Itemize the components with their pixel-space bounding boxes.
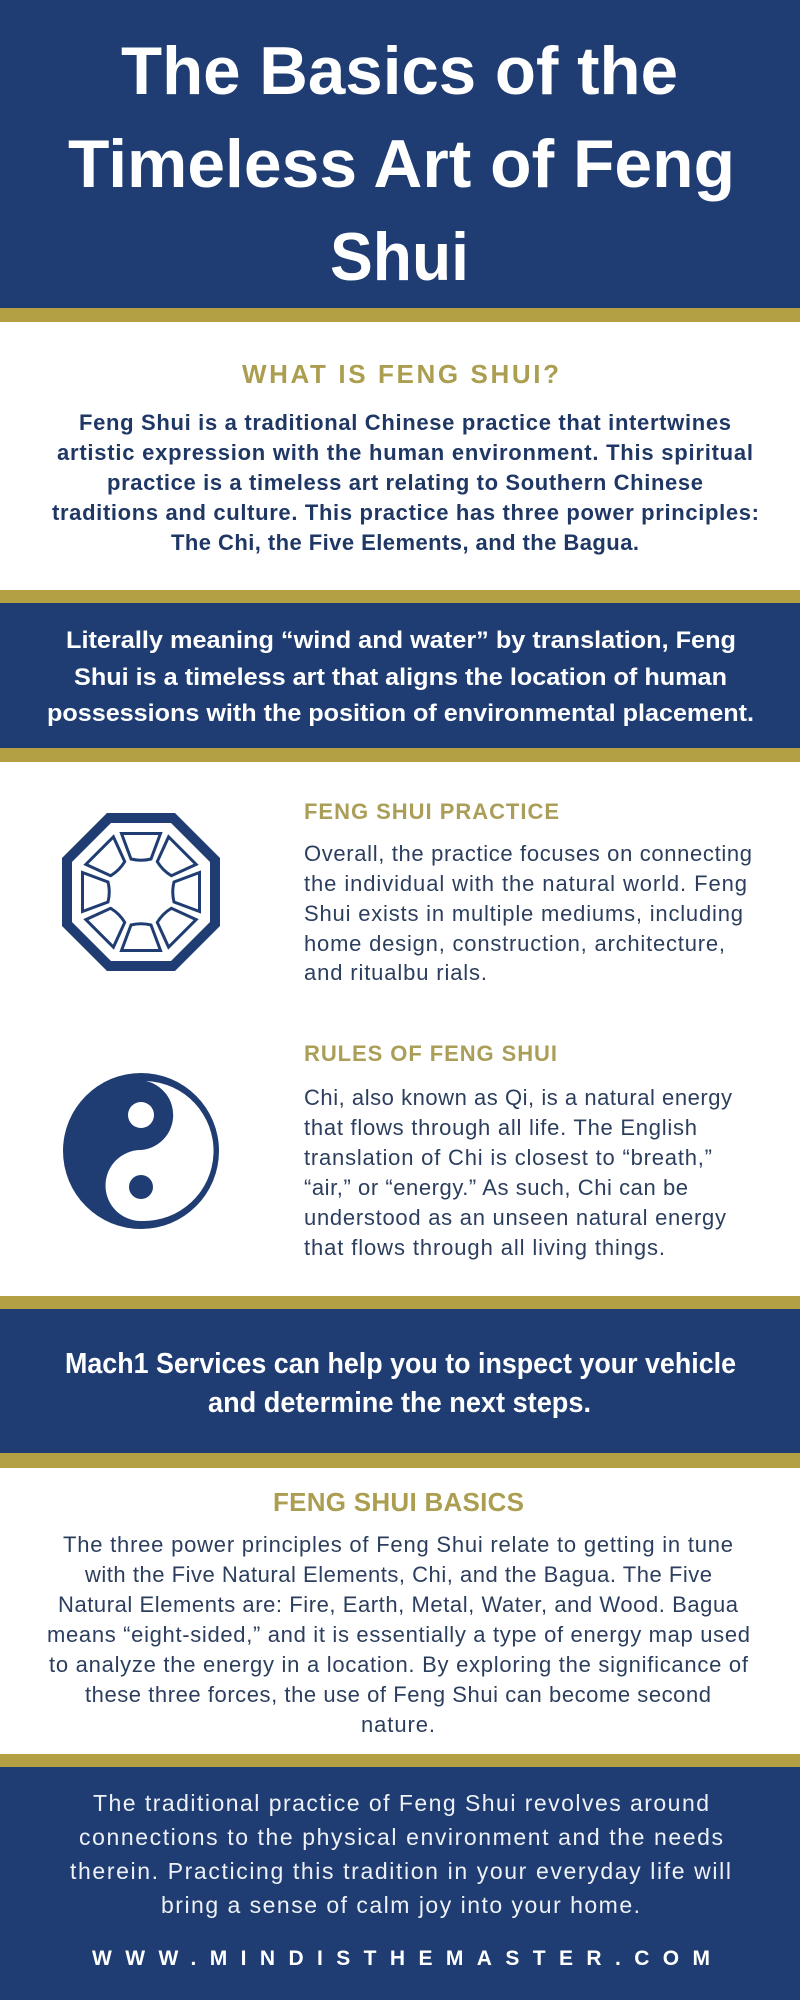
text block: rules: understood as an unseen natural energy bbox=[304, 1205, 726, 1230]
text block: practice: home design, construction, architecture, bbox=[304, 931, 725, 956]
text block: closing: connections to the physical environment and the needs bbox=[79, 1824, 723, 1850]
text block: practice: Overall, the practice focuses on connecting bbox=[304, 841, 752, 866]
text block: practice: and ritualbu rials. bbox=[304, 960, 487, 985]
text block: rules: that flows through all life. The English bbox=[304, 1115, 697, 1140]
icon: yin yang bbox=[63, 1073, 219, 1229]
text block: translation: Shui is a timeless art that aligns the location of human bbox=[74, 664, 727, 691]
text block: basics: these three forces, the use of Feng Shui can become second bbox=[85, 1682, 711, 1707]
text block: practice bbox=[304, 841, 752, 985]
panel: closing footer bbox=[0, 1754, 800, 2000]
text block: practice: the individual with the natural world. Feng bbox=[304, 871, 747, 896]
icon: bagua octagon bbox=[62, 813, 220, 971]
text block: rules: that flows through all living things. bbox=[304, 1235, 665, 1260]
text block: basics bbox=[47, 1532, 750, 1737]
text block: basics: means “eight-sided,” and it is essentially a type of energy map used bbox=[47, 1622, 750, 1647]
text block: call to action bbox=[65, 1348, 736, 1419]
panel: rules of feng shui bbox=[304, 1041, 732, 1260]
title: Shui bbox=[330, 219, 469, 295]
heading: rules of feng shui: RULES OF FENG SHUI bbox=[304, 1041, 557, 1066]
text block: closing: The traditional practice of Feng Shui revolves around bbox=[93, 1790, 709, 1816]
panel: call to action banner bbox=[0, 1296, 800, 1468]
text block: translation: possessions with the position of environmental placement. bbox=[47, 700, 754, 727]
text block: closing: bring a sense of calm joy into your home. bbox=[161, 1892, 640, 1918]
heading: what is feng shui: WHAT IS FENG SHUI? bbox=[242, 359, 559, 389]
panel: what is feng shui bbox=[52, 359, 759, 555]
website url: WWW.MINDISTHEMASTER.COM bbox=[92, 1947, 710, 1970]
text block: definition: Feng Shui is a traditional Chinese practice that intertwines bbox=[79, 410, 731, 435]
text block: translation: Literally meaning “wind and water” by translation, Feng bbox=[66, 627, 736, 654]
text block: rules: “air,” or “energy.” As such, Chi can be bbox=[304, 1175, 688, 1200]
text block: definition: traditions and culture. This practice has three power principles: bbox=[52, 500, 759, 525]
heading: feng shui practice: FENG SHUI PRACTICE bbox=[304, 799, 559, 824]
text block: rules bbox=[304, 1085, 732, 1260]
title: The Basics of the bbox=[121, 33, 678, 109]
text block: definition: practice is a timeless art relating to Southern Chinese bbox=[107, 470, 703, 495]
text block: call to action: Mach1 Services can help you to inspect your vehicle bbox=[65, 1348, 736, 1380]
text block: closing: therein. Practicing this tradition in your everyday life will bbox=[70, 1858, 731, 1884]
panel: title banner bbox=[0, 0, 800, 322]
text block: closing bbox=[70, 1790, 731, 1918]
title bbox=[68, 33, 735, 295]
text block: translation bbox=[47, 627, 754, 727]
panel: translation banner bbox=[0, 590, 800, 762]
title: Timeless Art of Feng bbox=[68, 126, 735, 202]
heading: feng shui basics: FENG SHUI BASICS bbox=[273, 1487, 524, 1517]
text block: definition bbox=[52, 410, 759, 555]
text block: call to action: and determine the next steps. bbox=[208, 1387, 591, 1419]
text block: basics: The three power principles of Feng Shui relate to getting in tune bbox=[63, 1532, 733, 1557]
text block: rules: Chi, also known as Qi, is a natural energy bbox=[304, 1085, 732, 1110]
text block: basics: with the Five Natural Elements, Chi, and the Bagua. The Five bbox=[84, 1562, 712, 1587]
text block: practice: Shui exists in multiple mediums, including bbox=[304, 901, 743, 926]
panel: feng shui basics bbox=[47, 1487, 750, 1737]
text block: definition: artistic expression with the human environment. This spiritual bbox=[57, 440, 753, 465]
panel: feng shui practice bbox=[304, 799, 752, 985]
text block: basics: to analyze the energy in a location. By exploring the significance of bbox=[49, 1652, 749, 1677]
text block: basics: Natural Elements are: Fire, Earth, Metal, Water, and Wood. Bagua bbox=[58, 1592, 739, 1617]
text block: rules: translation of Chi is closest to “breath,” bbox=[304, 1145, 712, 1170]
text block: basics: nature. bbox=[361, 1712, 435, 1737]
text block: definition: The Chi, the Five Elements, and the Bagua. bbox=[171, 530, 639, 555]
